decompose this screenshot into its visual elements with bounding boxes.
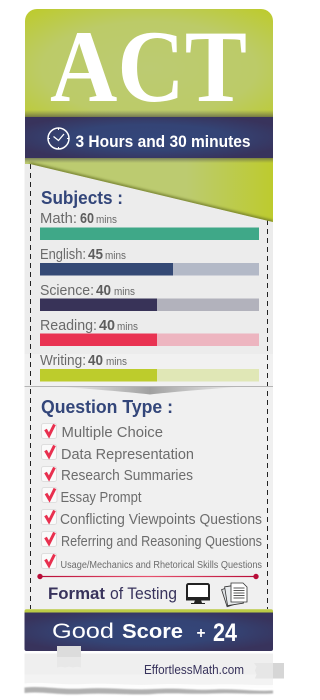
- good score text: [52, 619, 237, 647]
- question: essay prompt: Essay Prompt: [60, 490, 142, 506]
- website credit: EffortlessMath.com: [144, 663, 244, 677]
- subject: english: 45: [88, 246, 103, 263]
- question: usage mechanics: Usage/Mechanics and Rhetorical Skills Questions: [60, 560, 262, 571]
- good score text: 24: [213, 619, 237, 647]
- question: multiple choice: Multiple Choice: [62, 425, 163, 441]
- red rule with end dots: [37, 574, 259, 579]
- good score text: Score: [122, 621, 183, 643]
- subject: math: Math:: [40, 210, 77, 227]
- panel: good score band: [24, 609, 273, 651]
- question: conflicting viewpoints: Conflicting Viewpoints Questions: [60, 512, 262, 528]
- dashed side borders: [30, 164, 268, 609]
- icon: documents: [222, 583, 247, 607]
- right tape: [254, 663, 284, 678]
- subject: reading: 40: [99, 317, 115, 334]
- panel: green diagonal wedge: [25, 158, 273, 222]
- question: essay prompt: [42, 488, 142, 506]
- subject: writing: 40: [88, 352, 103, 369]
- panel: subjects: [40, 188, 259, 382]
- subject: english: mins: [105, 250, 126, 262]
- format of testing: Format: [48, 584, 105, 603]
- heading: subjects: Subjects :: [41, 188, 123, 208]
- duration text: 3 Hours and 30 minutes: [76, 132, 250, 151]
- subject: science: Science:: [40, 282, 94, 299]
- question: research summaries: Research Summaries: [61, 468, 193, 484]
- good score text: Good: [52, 620, 114, 643]
- format of testing: [48, 583, 247, 607]
- subject: math: 60: [80, 210, 94, 227]
- panel: main card background: [24, 158, 273, 610]
- icon: computer monitor: [186, 584, 210, 604]
- subject: writing: mins: [106, 356, 127, 368]
- left tape: [57, 646, 81, 668]
- panel: duration band: [25, 117, 273, 158]
- question: referring and reasoning: Referring and Reasoning Questions: [61, 534, 262, 550]
- panel: question types: [41, 397, 262, 571]
- subject: science: [40, 282, 259, 311]
- subject: math: [40, 210, 259, 240]
- title: ACT: [50, 10, 247, 124]
- subject: science: 40: [96, 282, 111, 299]
- subject: reading: [40, 317, 259, 346]
- subject: english: [40, 246, 259, 276]
- icon: clock: [48, 128, 69, 149]
- subject: writing: Writing:: [40, 352, 86, 369]
- panel: green header: [25, 9, 273, 117]
- good score text: +: [196, 625, 206, 642]
- question: usage mechanics: [42, 554, 262, 571]
- question: data representation: Data Representation: [61, 447, 194, 463]
- subject: reading: mins: [117, 321, 138, 333]
- subject: science: mins: [114, 286, 135, 298]
- subject: english: English:: [40, 246, 86, 263]
- subject: writing: [40, 352, 259, 382]
- format of testing: of Testing: [110, 585, 177, 603]
- subject: reading: Reading:: [40, 317, 97, 334]
- panel: torn paper footer: [24, 646, 284, 694]
- subject: math: mins: [96, 214, 117, 226]
- section divider: [24, 386, 273, 394]
- heading: question type: Question Type :: [41, 397, 173, 417]
